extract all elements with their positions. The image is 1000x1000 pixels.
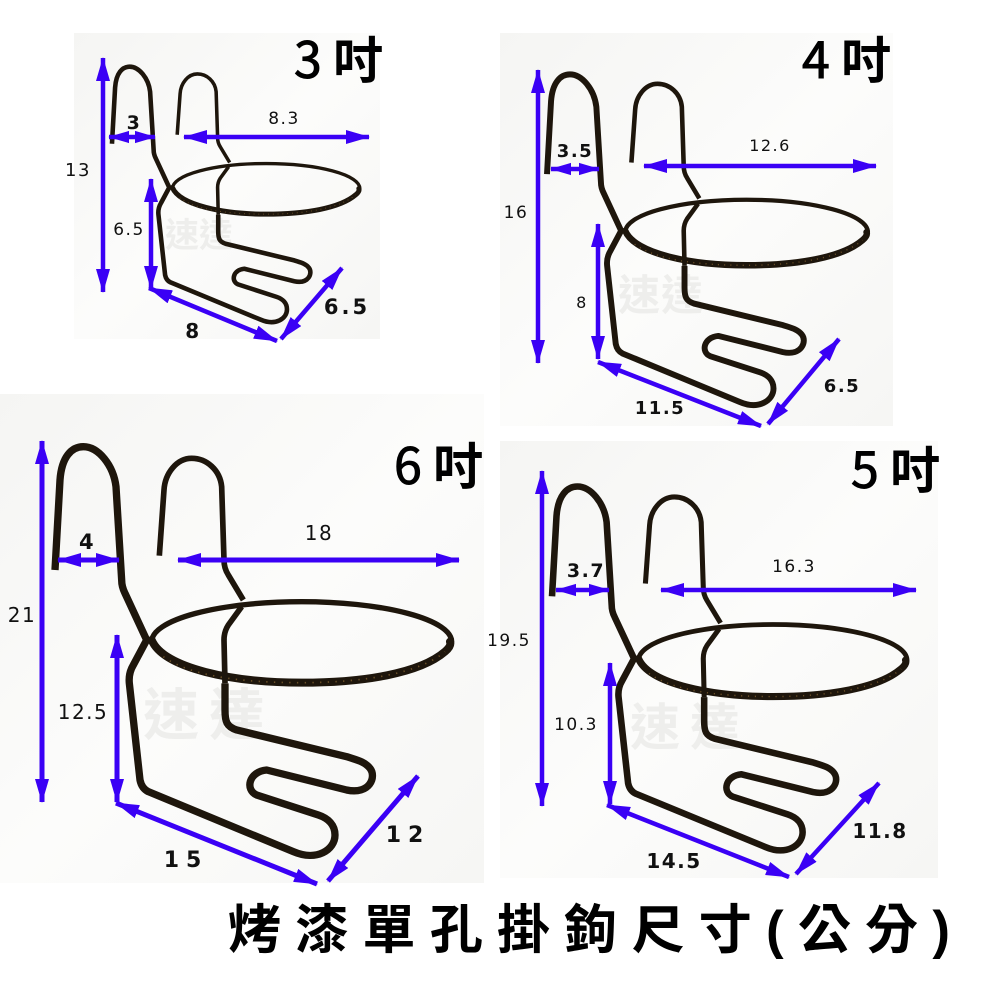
- panel: 3 inch hook: [65, 21, 383, 343]
- dimension labels: 11.8: [852, 819, 908, 843]
- size heading: 4 吋: [802, 21, 891, 93]
- watermark: 速 達: [618, 262, 703, 323]
- watermark: 速 達: [630, 688, 740, 760]
- size heading: 6 吋: [394, 427, 483, 499]
- dimension labels: 15: [164, 848, 208, 873]
- dimension labels: 8: [576, 293, 588, 312]
- hook photo: [552, 487, 907, 850]
- dimension labels: 6.5: [113, 220, 145, 240]
- dimension labels: 21: [8, 603, 36, 627]
- dimension labels: 12.5: [58, 700, 108, 724]
- dimension labels: 13: [65, 160, 91, 181]
- hook photo: [112, 67, 360, 322]
- watermark: 速 達: [165, 208, 233, 257]
- dimension labels: 12.6: [749, 136, 791, 155]
- dimension labels: 6.5: [324, 295, 370, 319]
- panel: 4 inch hook: [500, 21, 893, 426]
- dimension labels: 11.5: [635, 398, 685, 419]
- dimension arrows: [542, 471, 916, 877]
- dimension labels: [65, 109, 370, 343]
- size heading: 3 吋: [294, 21, 383, 93]
- hook photo: [547, 74, 868, 405]
- dimension labels: 10.3: [554, 715, 598, 735]
- dimension labels: 16.3: [772, 557, 816, 577]
- hook photo: [55, 447, 452, 855]
- dimension labels: [8, 521, 430, 873]
- panel: 5 inch hook: [487, 431, 940, 878]
- dimension arrows: [538, 70, 876, 426]
- dimension labels: 18: [305, 521, 333, 545]
- dimension labels: 3.7: [567, 560, 605, 582]
- dimension labels: 8: [185, 319, 201, 343]
- watermark: 速 達: [143, 671, 265, 752]
- dimension labels: 12: [386, 823, 430, 848]
- dimension labels: 19.5: [487, 631, 531, 651]
- dimension labels: 16: [504, 203, 528, 223]
- dimension arrows: [42, 441, 459, 884]
- panel: 6 inch hook: [0, 394, 484, 884]
- dimension labels: 8.3: [268, 109, 300, 129]
- dimension labels: 3: [127, 112, 141, 134]
- dimension labels: 14.5: [646, 849, 702, 873]
- dimension labels: 6.5: [824, 376, 860, 397]
- title: 烤漆單孔掛鉤尺寸(公分): [228, 901, 950, 960]
- dimension arrows: [103, 58, 369, 341]
- dimension labels: 3.5: [557, 141, 593, 162]
- dimension labels: [504, 136, 860, 419]
- size heading: 5 吋: [851, 431, 940, 503]
- dimension labels: [487, 557, 908, 873]
- dimension labels: 4: [79, 530, 95, 554]
